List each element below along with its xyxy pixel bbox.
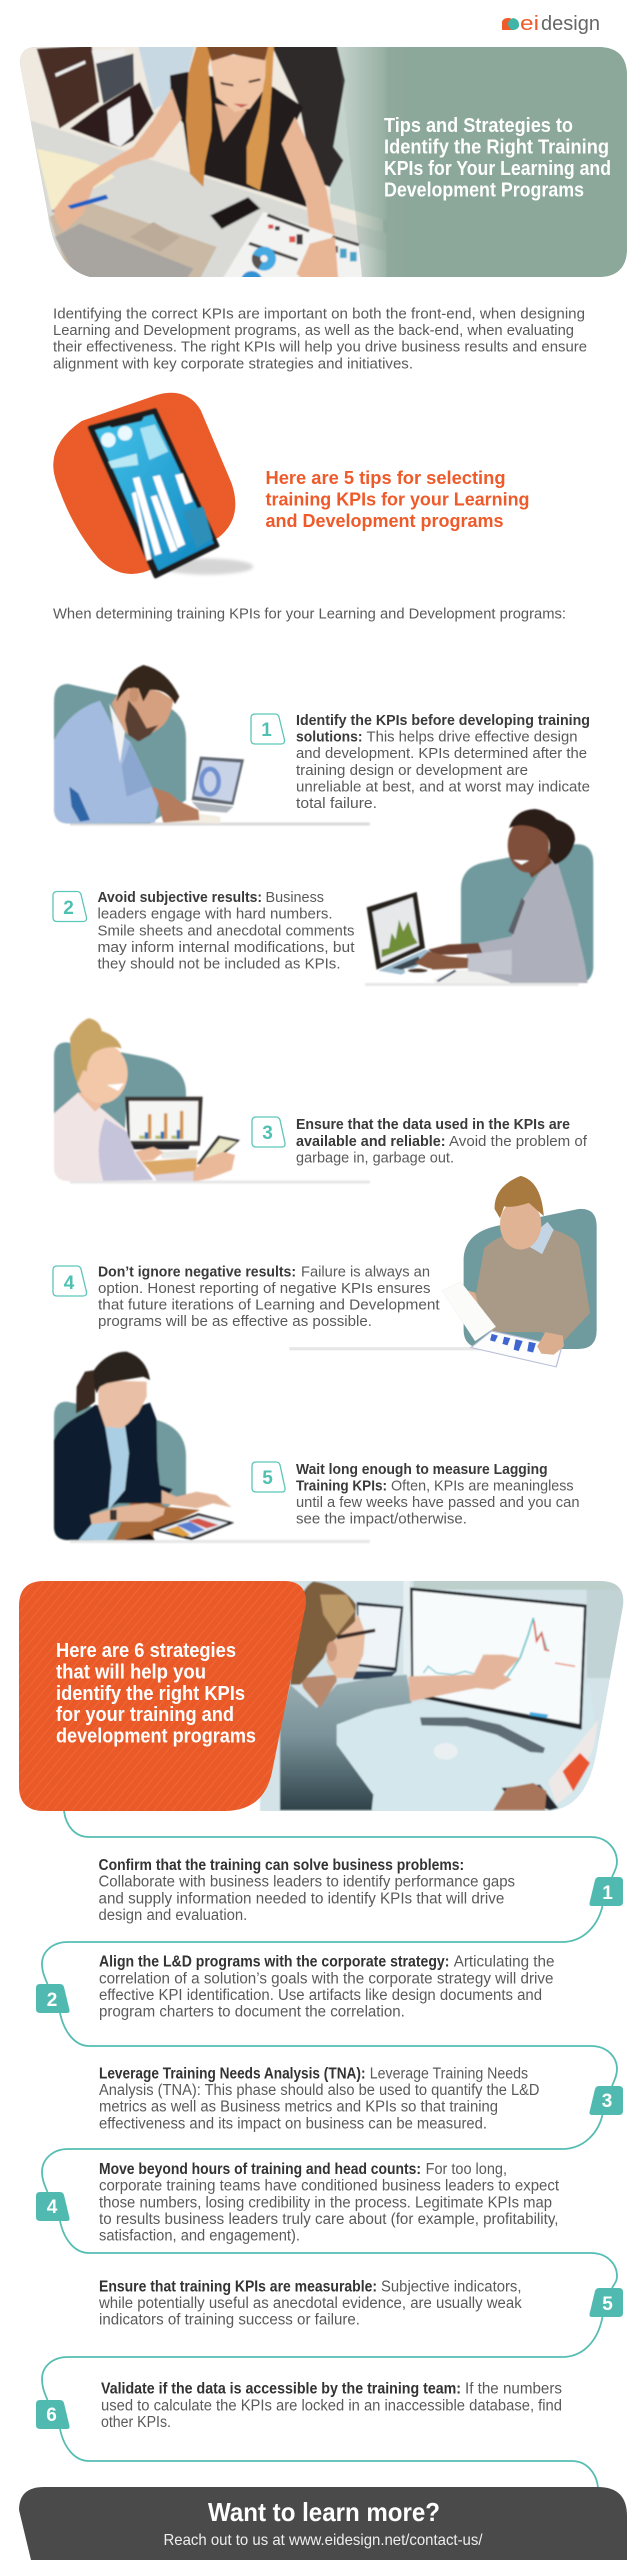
text: strategy 5: Subjective indicators, [381, 2278, 522, 2295]
text: strategy 3: Analysis (TNA): This phase should also be used to quantify the L&D [99, 2082, 540, 2099]
text: strategy 2: Articulating the [454, 1954, 554, 1971]
panel: hero banner [20, 47, 627, 277]
text: strategy 5: Ensure that training KPIs are measurable: [99, 2278, 377, 2295]
text block: tips lead-in: When determining training KPIs for your Learning and Development programs: [53, 606, 566, 622]
text: tip 3: Avoid the problem of [449, 1133, 588, 1150]
number badge 5 [252, 1462, 285, 1492]
text: strategy 3: Leverage Training Needs Analysis (TNA): [99, 2065, 366, 2082]
logo: eidesign [502, 13, 600, 35]
heading: 6 strategies: Here are 6 strategies [56, 1640, 236, 1662]
text: tip 5: see the impact/otherwise. [296, 1511, 467, 1528]
panel: tip 1 [54, 665, 590, 825]
logo: eidesign: design [541, 13, 600, 35]
number badge 4 [36, 2192, 70, 2221]
heading: main title: Identify the Right Training [384, 136, 609, 158]
text: strategy 4: to results business leaders truly care about (for example, profitability, [99, 2211, 558, 2228]
text: strategy 4: satisfaction, and engagement). [99, 2228, 300, 2244]
text: strategy 4: Move beyond hours of training and head counts: [99, 2161, 421, 2178]
text: strategy 2: effective KPI identification. Use artifacts like design documents and [99, 1987, 542, 2004]
text: tip 5: until a few weeks have passed and you can [296, 1494, 580, 1511]
number badge 4 [53, 1266, 87, 1296]
number badge 6: 6 [46, 2405, 57, 2426]
strategy 1 [98, 1857, 623, 1924]
text: strategy 1 [98, 1857, 515, 1924]
illustration: phone on orange blob [53, 393, 253, 576]
photo: woman in navy jacket with tablet [54, 1352, 370, 1543]
strategy 2 [36, 1954, 554, 2021]
number badge 5: 5 [602, 2294, 613, 2315]
text: tip 4 [98, 1263, 441, 1330]
text: contact line: Reach out to us at www.eidesign.net/contact-us/ [164, 2532, 483, 2549]
photo: woman working at a desk [20, 47, 627, 277]
text: strategy 4: corporate training teams have conditioned business leaders to expect [99, 2178, 560, 2195]
strategy 5 [98, 2278, 623, 2329]
text: tip 2: they should not be included as KPIs. [98, 956, 340, 972]
icon: logo blobs [502, 18, 519, 30]
connector: teal winding path [42, 1811, 617, 2487]
shape: orange blob [53, 393, 235, 574]
text: tip 2 [98, 889, 355, 972]
text: tip 1: and development. KPIs determined after the [296, 745, 587, 762]
heading: want to learn more: Want to learn more? [208, 2497, 440, 2527]
text: strategy 2: correlation of a solution’s goals with the corporate strategy will drive [99, 1970, 554, 1987]
number badge 4: 4 [47, 2197, 58, 2218]
number badge 1 [251, 714, 285, 744]
text: tip 1: unreliable at best, and at worst may indicate [296, 778, 590, 796]
number badge 5 [589, 2288, 623, 2317]
heading: 5 tips [266, 468, 530, 531]
photo: blonde woman with tablet [54, 1018, 370, 1184]
text: tip 2: may inform internal modifications, but [98, 939, 355, 956]
heading: 5 tips: and Development programs [266, 511, 504, 531]
text: tip 2: leaders engage with hard numbers. [98, 906, 332, 922]
number badge 1: 1 [602, 1883, 613, 1904]
text: strategy 2: program charters to document the correlation. [99, 2004, 405, 2021]
strategy 4 [36, 2161, 560, 2244]
text block: intro: Identifying the correct KPIs are important on both the front-end, when designing [53, 306, 585, 322]
photo: smiling woman at laptop [365, 809, 593, 986]
heading: 5 tips: Here are 5 tips for selecting [266, 468, 506, 488]
text: tip 2: Smile sheets and anecdotal comments [98, 922, 354, 939]
text: strategy 3: metrics as well as Business metrics and KPIs so that training [99, 2099, 498, 2116]
text block: intro: Learning and Development programs, as well as the back-end, when evaluating [53, 322, 574, 339]
text: tip 5: Often, KPIs are meaningless [391, 1478, 574, 1495]
text: strategy 2: Align the L&D programs with the corporate strategy: [99, 1954, 449, 1971]
strategy 6 [36, 2381, 562, 2431]
text: strategy 6: Validate if the data is accessible by the training team: [101, 2381, 461, 2398]
text: strategy 5 [98, 2278, 522, 2329]
text: tip 3 [296, 1116, 588, 1167]
heading: 5 tips: training KPIs for your Learning [266, 490, 530, 510]
text: strategy 1: Confirm that the training can solve business problems: [98, 1857, 464, 1874]
text: tip 1: training design or development are [296, 762, 528, 779]
text: tip 1: Identify the KPIs before developing training [296, 712, 590, 729]
text: strategy 6: If the numbers [465, 2381, 562, 2398]
number badge 5: 5 [262, 1468, 273, 1489]
number badge 1: 1 [261, 720, 272, 741]
panel: tip 4 [53, 1176, 597, 1367]
heading: 6 strategies: development programs [56, 1726, 256, 1748]
icon: smartphone with charts [90, 410, 217, 576]
text block: intro: alignment with key corporate strategies and initiatives. [53, 355, 413, 372]
panel: footer call to action [19, 2487, 627, 2560]
text: tip 4: option. Honest reporting of negative KPIs ensures [98, 1280, 431, 1297]
number badge 3 [589, 2086, 623, 2115]
number badge 3: 3 [602, 2091, 612, 2112]
text: strategy 6 [101, 2381, 562, 2431]
heading: main title: KPIs for Your Learning and [384, 158, 611, 180]
number badge 3 [252, 1117, 285, 1147]
text: tip 4: Failure is always an [301, 1263, 430, 1280]
text: strategy 5: indicators of training success or failure. [99, 2312, 360, 2329]
text block: intro: their effectiveness. The right KPIs will help you drive business results and ensure [53, 339, 587, 356]
text: strategy 6: other KPIs. [101, 2414, 171, 2431]
text: strategy 4: those numbers, losing credibility in the process. Legitimate KPIs map [99, 2194, 552, 2211]
number badge 6 [36, 2400, 70, 2429]
photo: man reviewing chart [289, 1176, 597, 1367]
number badge 3: 3 [262, 1123, 273, 1144]
text: tip 3: available and reliable: [296, 1133, 446, 1150]
text: strategy 1: and supply information needed to identify KPIs that will drive [98, 1890, 504, 1907]
text: strategy 1: design and evaluation. [98, 1907, 247, 1924]
text: tip 4: programs will be as effective as possible. [98, 1313, 372, 1330]
heading: 6 strategies: that will help you [56, 1662, 206, 1684]
heading: 6 strategies: identify the right KPIs [56, 1683, 245, 1705]
text: tip 4: Don’t ignore negative results: [98, 1263, 296, 1280]
text: tip 2: Avoid subjective results: [98, 889, 262, 906]
text: tip 3: Ensure that the data used in the KPIs are [296, 1116, 570, 1133]
panel: tip 5 [54, 1352, 580, 1543]
text: strategy 1: Collaborate with business leaders to identify performance gaps [98, 1874, 515, 1891]
text: tip 5: Wait long enough to measure Lagging [296, 1461, 548, 1478]
number badge 2: 2 [63, 898, 74, 919]
number badge 1 [589, 1877, 623, 1906]
text: tip 1: This helps drive effective design [366, 728, 578, 746]
heading: main title: Development Programs [384, 180, 584, 202]
text: strategy 4: For too long, [426, 2161, 507, 2178]
photo: woman pointing at monitor [260, 1575, 633, 1815]
text: strategy 2 [99, 1954, 554, 2021]
number badge 4: 4 [64, 1273, 75, 1294]
text: strategy 3: effectiveness and its impact on business can be measured. [99, 2115, 487, 2132]
text: tip 1: total failure. [296, 795, 377, 812]
text: tip 2: Business [266, 889, 324, 906]
logo: eidesign: ei [520, 13, 539, 35]
photo: man writing at laptop [54, 665, 370, 825]
text block: intro [53, 306, 587, 372]
panel: tip 2 [53, 809, 593, 986]
text: strategy 3 [99, 2065, 540, 2132]
panel: tip 3 [54, 1018, 588, 1184]
panel: orange heading box [19, 1581, 306, 1811]
text: strategy 6: used to calculate the KPIs are locked in an inaccessible database, find [101, 2397, 562, 2414]
heading: main title: Tips and Strategies to [384, 115, 573, 137]
text: strategy 4 [99, 2161, 560, 2244]
text: tip 4: that future iterations of Learning and Development [98, 1296, 441, 1313]
number badge 2: 2 [47, 1990, 57, 2011]
strategy 3 [99, 2065, 623, 2132]
heading: 6 strategies [56, 1640, 256, 1748]
panel: strategies banner [19, 1575, 633, 1815]
heading: main title [384, 115, 611, 202]
text: tip 1: solutions: [296, 728, 362, 746]
text: strategy 3: Leverage Training Needs [370, 2065, 528, 2082]
text: tip 3: garbage in, garbage out. [296, 1150, 454, 1167]
text: tip 5 [296, 1461, 580, 1528]
text: strategy 5: while potentially useful as anecdotal evidence, are usually weak [98, 2295, 522, 2312]
number badge 2 [36, 1984, 70, 2013]
heading: 6 strategies: for your training and [56, 1704, 234, 1726]
text: tip 5: Training KPIs: [296, 1478, 387, 1495]
text: tip 1 [296, 712, 590, 812]
number badge 2 [53, 892, 87, 922]
